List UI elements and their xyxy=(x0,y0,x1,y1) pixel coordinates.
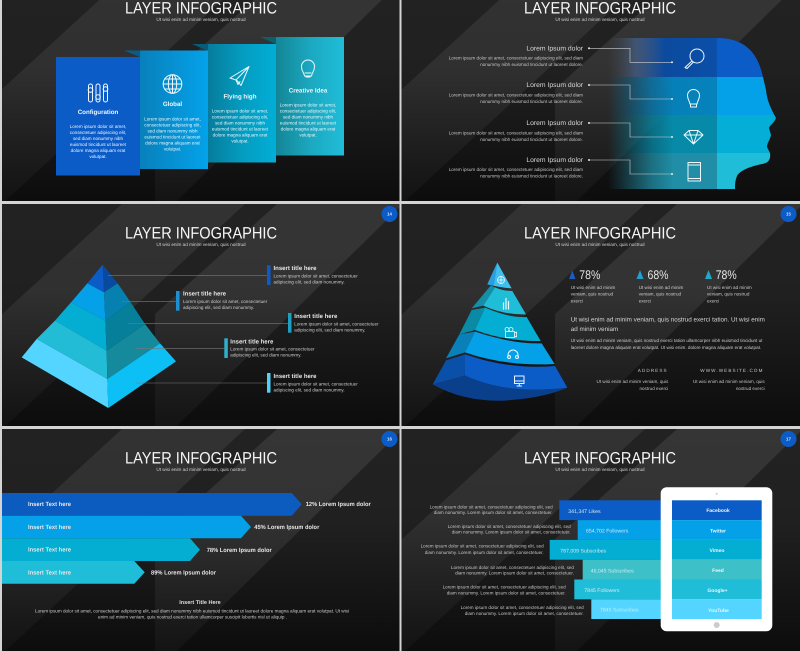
statistic 2 xyxy=(636,268,684,304)
text block: website: WWW.WEBSITE.COM xyxy=(700,368,764,373)
callout 2 xyxy=(122,291,268,311)
statistic 1 xyxy=(569,268,616,304)
row 1 text and connector: nonummy nibh euismod tincidunt ut laoreet dolore. xyxy=(480,62,583,67)
title: LAYER INFOGRAPHIC xyxy=(524,449,676,467)
statistic 1: Ut wisi enim ad minim xyxy=(571,285,616,290)
icon: bar chart xyxy=(504,298,508,309)
callout 2: adipiscing elit, sed diam nonummy. xyxy=(183,305,254,310)
tablet xyxy=(661,487,772,631)
text block: insert title: Lorem ipsum dolor sit amet, consectetuer adipiscing elit, sed diam nonummy nibh euismod tincidunt ut laoreet dolore magna aliquam erat volutpat. Ut wisi xyxy=(35,608,349,614)
subtitle: Ut wisi enim ad minim veniam, quis nostrud xyxy=(555,17,645,22)
card: flying high: volutpat. xyxy=(231,138,249,144)
tablet: Google+ xyxy=(707,588,728,594)
subtitle: Ut wisi enim ad minim veniam, quis nostrud xyxy=(555,242,645,247)
page badge 17 xyxy=(780,431,796,447)
callout 3: adipiscing elit, sed diam nonummy. xyxy=(294,328,365,332)
row 4 text and connector xyxy=(449,157,673,178)
statistic 3: exerci xyxy=(707,299,719,304)
text block: summary: Ut wisi enim ad minim veniam, quis nostrud exerci tation ullamcorper nibh euismod tincidunt ut xyxy=(571,338,763,343)
panel: arrow bars slide xyxy=(2,431,398,620)
arrow bar 4: Insert Text here xyxy=(28,569,72,576)
panel: layered pyramid slide xyxy=(22,206,398,408)
title: LAYER INFOGRAPHIC xyxy=(125,449,277,467)
statistic 2: exerci xyxy=(639,299,651,304)
row 3 text and connector xyxy=(449,120,673,142)
callout 4: Lorem ipsum dolor sit amet, consectetuer xyxy=(230,347,315,352)
card: global: Lorem ipsum dolor sit amet, xyxy=(144,116,201,122)
card: creative idea: Creative Idea xyxy=(289,88,328,94)
icon: headphones xyxy=(508,350,518,358)
card: flying high: Lorem ipsum dolor sit amet, xyxy=(212,108,268,114)
callout 1: Insert title here xyxy=(274,265,317,272)
callout 2: Insert title here xyxy=(183,291,227,298)
card: flying high: consectetuer adipiscing elit, xyxy=(212,114,268,120)
text block: address: ADDRESS xyxy=(638,368,668,373)
icon: globe xyxy=(163,75,182,93)
card: creative idea: sed diam nonummy nibh xyxy=(283,114,333,120)
row 1 text and connector: Lorem ipsum dolor sit amet, consectetuer adipiscing elit, sed diam xyxy=(449,56,583,60)
icon: light bulb xyxy=(302,60,314,77)
row 3 text and connector: Lorem Ipsum dolor xyxy=(526,120,584,127)
text: strip descriptions: diam nonummy. Lorem ipsum dolor sit amet, consectetuer. xyxy=(425,550,544,555)
text block: website xyxy=(693,368,765,391)
title: LAYER INFOGRAPHIC xyxy=(125,224,277,242)
arrow bar 1: Insert Text here xyxy=(28,501,72,508)
tablet: Facebook xyxy=(706,508,730,514)
callout 3: Insert title here xyxy=(294,313,338,320)
card: configuration xyxy=(56,57,140,176)
chart: stepped strips: 341,347 Likes xyxy=(568,509,601,515)
row 4 text and connector: Lorem ipsum dolor sit amet, consectetuer adipiscing elit, sed diam xyxy=(449,167,583,172)
card: creative idea: Lorem ipsum dolor sit amet, xyxy=(280,102,336,108)
callout 1: Lorem ipsum dolor sit amet, consectetuer xyxy=(274,274,358,278)
text: strip descriptions: diam nonummy. Lorem ipsum dolor sit amet, consectetuer. xyxy=(455,571,574,576)
row 2 text and connector xyxy=(449,82,673,104)
card: configuration: volutpat. xyxy=(89,154,107,159)
text block: address xyxy=(597,368,669,391)
arrow bar 4 xyxy=(2,561,217,584)
card: global: volutpat. xyxy=(164,146,181,152)
page badge 14 xyxy=(382,206,398,222)
callout 5 xyxy=(136,373,358,393)
statistic 3: veniam, quis nostrud xyxy=(707,292,750,297)
text block: insert title: Insert Title Here xyxy=(179,600,221,606)
card: flying high: euismod tincidunt ut laoreet xyxy=(212,126,269,132)
row 1 text and connector xyxy=(449,46,673,67)
page badge 14: 14 xyxy=(387,212,392,217)
text block: insert title xyxy=(35,600,349,620)
card: flying high: sed diam nonummy nibh xyxy=(215,120,265,126)
card: configuration: Configuration xyxy=(78,109,118,116)
text block: summary xyxy=(571,316,765,350)
subtitle: Ut wisi enim ad minim veniam, quis nostrud xyxy=(156,242,246,247)
arrow bar 3: 78% Lorem Ipsum dolor xyxy=(207,547,272,554)
subtitle: Ut wisi enim ad minim veniam, quis nostrud xyxy=(555,467,645,472)
card: creative idea: euismod tincidunt ut laoreet xyxy=(280,120,337,126)
card: configuration: sed diam nonummy nibh xyxy=(73,136,123,141)
chart: stepped strips: 654,702 Followers xyxy=(586,528,629,534)
arrow bar 3: Insert Text here xyxy=(28,547,72,554)
row 3 text and connector: Lorem ipsum dolor sit amet, consectetuer adipiscing elit, sed diam xyxy=(449,130,583,136)
text block: summary: ad minim veniam xyxy=(571,326,618,333)
callout 1: adipiscing elit, sed diam nonummy. xyxy=(274,280,345,284)
callout 5: Insert title here xyxy=(274,373,317,380)
text: strip descriptions: Lorem ipsum dolor sit amet, consectetuer adipiscing elit, sed xyxy=(461,605,584,610)
icon: video camera xyxy=(505,328,516,338)
text block: website: Ut wisi enim ad minim veniam, quis xyxy=(693,379,765,384)
card: configuration: Lorem ipsum dolor sit amet, xyxy=(70,124,126,129)
chart: fading head bands xyxy=(608,38,779,189)
icon: tablet xyxy=(688,162,700,181)
text: strip descriptions xyxy=(421,504,584,616)
card: creative idea: volutpat. xyxy=(299,132,317,138)
row 4 text and connector: Lorem Ipsum dolor xyxy=(526,157,584,164)
text block: insert title: enim ad minim veniam, quis nostrud exerci tation ullamcorper suscipit lobortis nisl ut aliquip . xyxy=(98,614,287,620)
chart: stepped strips: 46,045 Subscribes xyxy=(591,568,634,574)
row 2 text and connector: Lorem Ipsum dolor xyxy=(526,82,584,89)
card: configuration: consectetuer adipiscing elit, xyxy=(70,130,126,135)
panel: folded cards slide xyxy=(56,0,344,175)
row 4 text and connector: nonummy nibh euismod tincidunt ut laoreet dolore. xyxy=(480,174,583,178)
card: global: dolore magna aliquam erat xyxy=(145,140,201,146)
card: configuration: dolore magna aliquam erat xyxy=(71,148,126,153)
chart: stepped strips: 787,009 Subscribes xyxy=(560,548,607,554)
chart: stepped strips xyxy=(550,500,662,619)
text: strip descriptions: diam nonummy. Lorem ipsum dolor sit amet, consectetuer. xyxy=(434,510,553,515)
subtitle: Ut wisi enim ad minim veniam, quis nostrud xyxy=(156,17,246,22)
text block: summary: laoreet dolore magna aliquam erat volutpat. Ut wisi enim. dolore magna aliquam erat volutpat. xyxy=(571,345,761,350)
chart: stepped strips: 7845 Followers xyxy=(584,588,620,594)
card: creative idea: consectetuer adipiscing elit, xyxy=(280,108,336,114)
card: global xyxy=(124,50,208,169)
icon: globe xyxy=(498,276,504,284)
card: configuration: euismod tincidunt ut laoreet xyxy=(70,142,127,147)
text block: summary: Ut wisi enim ad minim veniam, quis nostrud exerci tation. Ut wisi enim xyxy=(571,316,765,324)
callout 5: Lorem ipsum dolor sit amet, consectetuer xyxy=(274,382,358,386)
row 2 text and connector: nonummy nibh euismod tincidunt ut laoreet dolore. xyxy=(480,99,583,104)
text block: address: Ut wisi enim ad minim veniam, quis xyxy=(597,379,669,384)
statistic 1: veniam, quis nostrud xyxy=(571,292,614,297)
chart: layered cone xyxy=(433,263,567,401)
callout 3 xyxy=(128,313,379,333)
row 2 text and connector: Lorem ipsum dolor sit amet, consectetuer adipiscing elit, sed diam xyxy=(449,92,583,98)
icon: bulb xyxy=(688,90,700,107)
card: flying high xyxy=(192,44,276,162)
page badge 16: 16 xyxy=(387,437,392,442)
page badge 16 xyxy=(382,431,398,447)
text: strip descriptions: diam nonummy. Lorem ipsum dolor sit amet, consectetuer. xyxy=(465,611,584,616)
card: global: consectetuer adipiscing elit, xyxy=(144,122,201,128)
arrow bar 3 xyxy=(2,538,272,561)
callout 5: adipiscing elit, sed diam nonummy. xyxy=(274,388,345,392)
icon: diamond xyxy=(684,130,703,144)
arrow bar 2: Insert Text here xyxy=(28,524,72,531)
statistic 3: 78% xyxy=(716,268,737,282)
arrow bar 1 xyxy=(2,493,371,516)
card: global: sed diam nonummy nibh xyxy=(147,128,198,134)
text: strip descriptions: diam nonummy. Lorem ipsum dolor sit amet, consectetuer. xyxy=(447,590,566,596)
text: strip descriptions: Lorem ipsum dolor sit amet, consectetuer adipiscing elit, sed xyxy=(443,584,566,590)
page badge 15 xyxy=(780,206,796,222)
icon: paper plane xyxy=(230,66,249,86)
arrow bar 1: 12% Lorem Ipsum dolor xyxy=(306,501,371,508)
page badge 15: 15 xyxy=(786,212,791,217)
statistic 3 xyxy=(705,268,752,304)
callout 1 xyxy=(108,265,358,285)
text: strip descriptions: Lorem ipsum dolor sit amet, consectetuer adipiscing elit, sed xyxy=(430,504,553,510)
text: strip descriptions: Lorem ipsum dolor sit amet, consectetuer adipiscing elit, sed xyxy=(451,565,574,570)
text: strip descriptions: diam nonummy. Lorem ipsum dolor sit amet, consectetuer. xyxy=(452,530,571,535)
statistic 2: veniam, quis nostrud xyxy=(639,292,682,297)
text: strip descriptions: Lorem ipsum dolor sit amet, consectetuer adipiscing elit, sed xyxy=(448,524,571,529)
chart: pyramid xyxy=(22,265,176,408)
card: flying high: dolore magna aliquam erat xyxy=(213,132,268,138)
statistic 1: 78% xyxy=(579,268,600,282)
page badge 17: 17 xyxy=(786,437,791,442)
arrow bar 4: 89% Lorem Ipsum dolor xyxy=(151,570,217,577)
subtitle: Ut wisi enim ad minim veniam, quis nostrud xyxy=(156,467,246,472)
callout 4: Insert title here xyxy=(230,338,274,345)
arrow bar 2: 45% Lorem Ipsum dolor xyxy=(254,524,320,531)
card: global: Global xyxy=(163,101,182,108)
callout 4: adipiscing elit, sed diam nonummy. xyxy=(230,353,301,358)
callout 3: Lorem ipsum dolor sit amet, consectetuer xyxy=(294,322,379,326)
text block: address: nostrud exerci xyxy=(639,386,668,391)
panel: tablet social slide xyxy=(421,431,796,631)
callout 2: Lorem ipsum dolor sit amet, consectetuer xyxy=(183,299,268,304)
icon: sliders xyxy=(88,84,108,102)
arrow bar 2 xyxy=(2,516,320,538)
tablet: Vimeo xyxy=(710,548,724,554)
card: creative idea xyxy=(260,37,344,156)
icon: magnifier xyxy=(685,49,704,68)
title: LAYER INFOGRAPHIC xyxy=(524,224,676,242)
callout 4 xyxy=(136,338,315,358)
icon: monitor xyxy=(514,376,524,386)
chart: stepped strips: 7845 Subscribes xyxy=(600,608,639,614)
tablet: YouTube xyxy=(708,608,729,614)
statistic 2: 68% xyxy=(648,268,668,282)
card: flying high: Flying high xyxy=(224,94,257,100)
panel: head profile slide xyxy=(449,0,779,189)
card: creative idea: dolore magna aliquam erat xyxy=(281,126,336,132)
row 1 text and connector: Lorem Ipsum dolor xyxy=(526,46,584,52)
card: global: euismod tincidunt ut laoreet xyxy=(144,134,201,140)
statistic 2: Ut wisi enim ad minim xyxy=(639,285,684,290)
tablet: Twitter xyxy=(710,528,726,534)
tablet: Feed xyxy=(712,568,724,574)
statistic 1: exerci xyxy=(571,299,583,304)
text: strip descriptions: Lorem ipsum dolor sit amet, consectetuer adipiscing elit, sed xyxy=(421,544,544,549)
statistic 3: Ut wisi enim ad minim xyxy=(707,285,752,290)
text block: website: nostrud exerci xyxy=(736,386,765,391)
panel: cone and statistics slide xyxy=(433,206,796,401)
row 3 text and connector: nonummy nibh euismod tincidunt ut laoreet dolore. xyxy=(480,137,583,142)
